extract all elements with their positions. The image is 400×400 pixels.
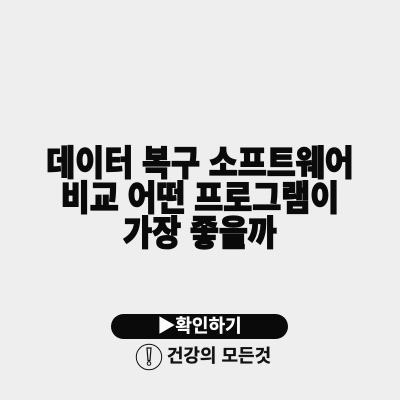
button: confirm bbox=[111, 314, 288, 339]
brand label: 건강의 모든것 bbox=[167, 346, 271, 366]
icon: exclamation circle bbox=[136, 344, 162, 370]
title: 비교 어떤 프로그램이 bbox=[61, 179, 339, 218]
title: 가장 좋을까 bbox=[123, 214, 277, 253]
title: 데이터 복구 소프트웨어 bbox=[46, 144, 354, 183]
title bbox=[46, 144, 354, 253]
button: confirm: ▶확인하기 bbox=[157, 316, 242, 336]
